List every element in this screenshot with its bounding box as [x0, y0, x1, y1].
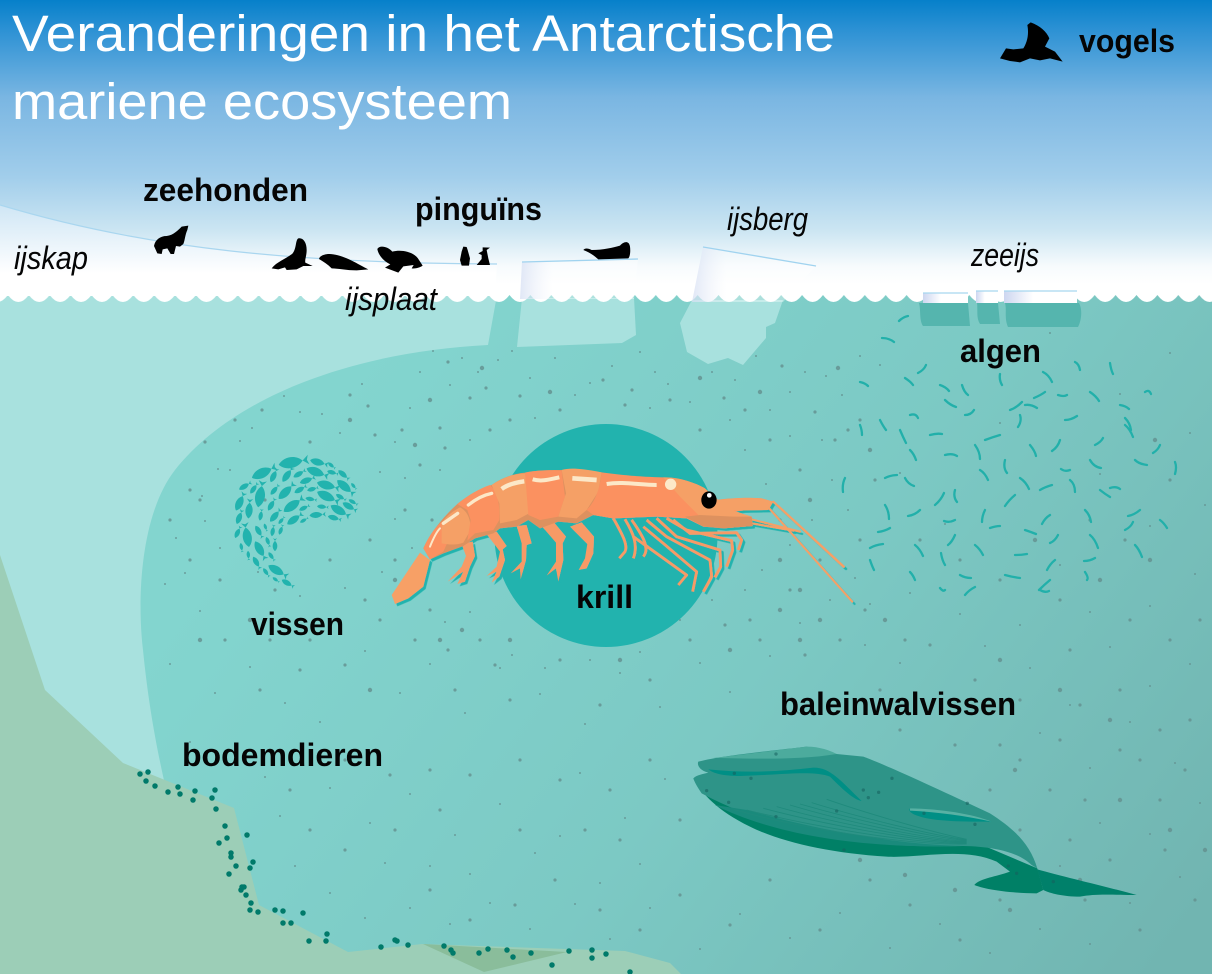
throat grooves — [733, 799, 967, 844]
flipper — [909, 808, 992, 822]
head — [663, 477, 773, 528]
icon: bird — [1000, 22, 1063, 62]
iceberg above water — [520, 247, 816, 302]
label: zeehonden: zeehonden — [143, 172, 308, 208]
under-water ice shelf — [0, 295, 497, 785]
antennae — [752, 502, 852, 602]
krill circle — [494, 424, 718, 647]
ice cap and ice shelf above water — [0, 205, 497, 296]
icon: sea lion — [272, 238, 313, 270]
highlights — [430, 528, 440, 547]
label: krill: krill — [576, 579, 633, 615]
body segments — [423, 520, 452, 559]
iceberg under water — [517, 298, 783, 365]
label: vissen: vissen — [251, 606, 344, 642]
mouth line — [708, 768, 862, 801]
krill — [392, 469, 852, 604]
particles over whale — [707, 754, 1053, 882]
bottom animals — [140, 772, 630, 972]
label: ijskap: ijskap — [14, 240, 88, 276]
label: vogels: vogels — [1079, 23, 1175, 59]
lower belly layer — [715, 805, 963, 846]
sea ice with algae underneath — [919, 291, 1081, 327]
sea floor — [0, 555, 681, 974]
body base — [423, 470, 613, 559]
icon: seal on iceberg — [583, 242, 630, 259]
ocean water — [0, 295, 1212, 974]
label: baleinwalvissen: baleinwalvissen — [780, 686, 1016, 722]
upper jaw highlight — [713, 747, 837, 759]
label: ijsplaat: ijsplaat — [345, 281, 438, 317]
title: Veranderingen in het Antarctische — [12, 5, 835, 62]
title: mariene ecosysteem — [12, 73, 512, 130]
title — [12, 5, 835, 130]
sky background — [0, 0, 1212, 296]
label: pinguïns: pinguïns — [415, 191, 542, 227]
icon: seal on ice cap — [154, 226, 188, 254]
whale tail — [1037, 869, 1137, 897]
whale body — [693, 747, 1037, 868]
label: ijsberg: ijsberg — [727, 201, 808, 237]
icon: fur seal — [377, 247, 423, 273]
algae — [843, 316, 1176, 595]
tail fan — [392, 553, 430, 604]
label: bodemdieren: bodemdieren — [182, 737, 383, 773]
wave line at water surface — [0, 295, 1212, 303]
whale belly — [693, 778, 1043, 893]
suspended particles — [165, 333, 1205, 953]
label: zeeijs: zeeijs — [970, 237, 1039, 273]
thin legs — [613, 518, 742, 592]
icon: lying seal — [319, 254, 368, 270]
swimming legs — [448, 522, 594, 584]
fish school — [233, 454, 359, 589]
icon: penguins — [460, 247, 490, 266]
carapace — [587, 472, 773, 527]
eye — [701, 491, 717, 509]
whale — [693, 747, 1137, 897]
label: algen: algen — [960, 333, 1041, 369]
